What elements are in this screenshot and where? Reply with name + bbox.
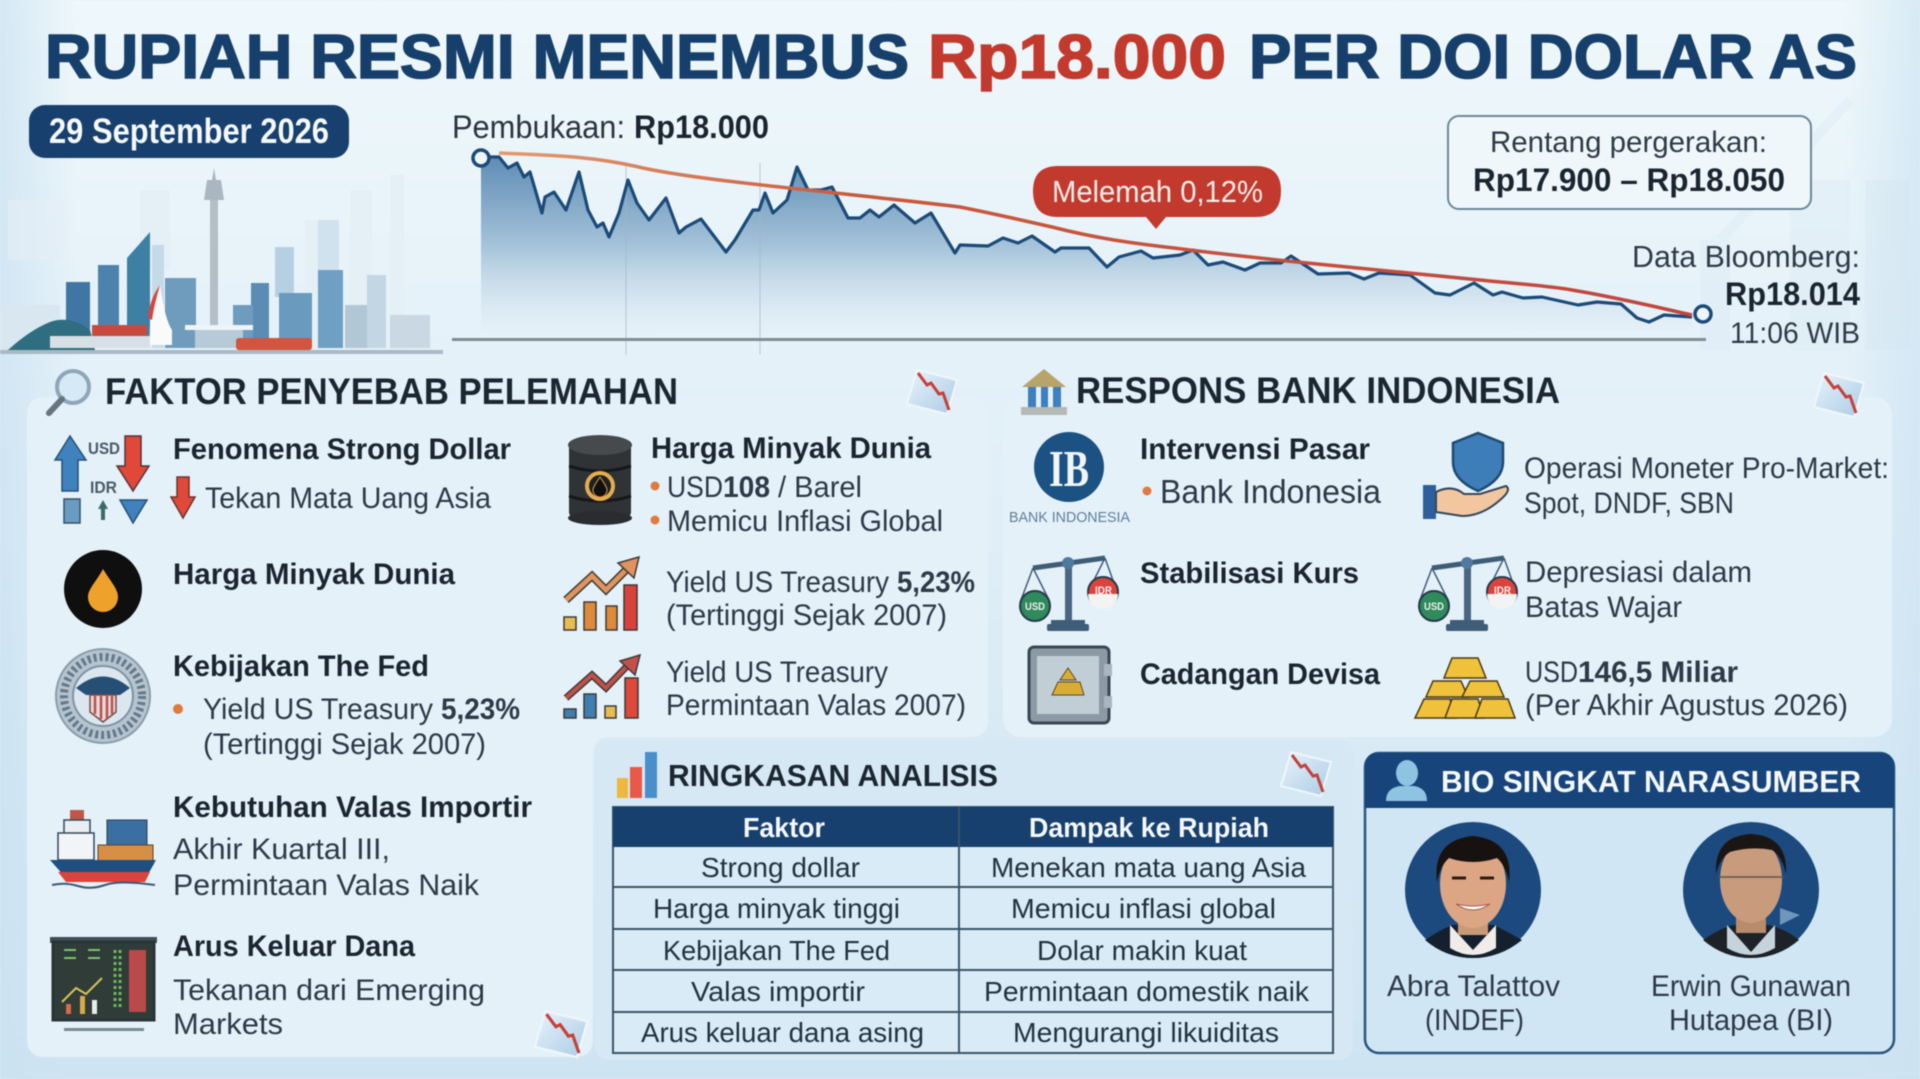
title <box>45 23 1857 92</box>
icon: cargo ship <box>50 810 156 888</box>
icon: USD IDR arrows: USD <box>88 439 120 458</box>
item: strong dollar: Tekan Mata Uang Asia <box>205 482 491 515</box>
item: the Fed policy <box>56 649 520 761</box>
illustration: Jakarta skyline <box>0 168 443 354</box>
box: trading range: Rp17.900 – Rp18.050 <box>1473 162 1785 198</box>
date badge: 29 September 2026 <box>49 112 329 151</box>
title: Rp18.000 <box>928 23 1226 92</box>
item: strong dollar: Fenomena Strong Dollar <box>173 433 511 466</box>
icon: trading monitor <box>50 937 157 1031</box>
icon: person <box>1386 760 1427 801</box>
item: the Fed policy: 5,23% <box>441 693 520 726</box>
icon: rising chart red <box>564 655 640 718</box>
item: oil price <box>64 550 455 628</box>
box: trading range <box>1448 116 1811 209</box>
caption: Erwin Gunawan Hutapea <box>1651 970 1851 1037</box>
box: trading range: Rentang pergerakan: <box>1490 126 1767 159</box>
panel: Bank Indonesia response <box>1003 369 1892 737</box>
callout: weakening percent <box>1033 166 1281 229</box>
item: importers' forex needs: Permintaan Valas Naik <box>173 869 480 902</box>
item: the Fed policy: Yield US Treasury <box>203 693 433 726</box>
table: factor and impact: Dolar makin kuat <box>1037 935 1247 966</box>
item: reserves amount: 146,5 Miliar <box>1578 656 1738 689</box>
heading: causes: FAKTOR PENYEBAB PELEMAHAN <box>105 371 678 412</box>
item: reserves amount <box>1415 656 1848 722</box>
bullet <box>650 516 660 524</box>
item: pro-market monetary operation: Operasi Moneter Pro-Market: <box>1524 452 1889 485</box>
item: yield and forex demand: Yield US Treasury <box>666 656 888 689</box>
portrait: Erwin Gunawan Hutapea <box>1683 822 1819 958</box>
item: US treasury yield <box>564 557 975 632</box>
panel: speaker bios <box>1365 753 1894 1053</box>
icon: USD IDR arrows: IDR <box>90 478 117 497</box>
item: depreciation within limits: Batas Wajar <box>1525 591 1682 624</box>
icon: federal reserve seal <box>56 649 150 743</box>
icon: oil barrel <box>568 435 632 525</box>
table: factor and impact: Mengurangi likuiditas <box>1013 1017 1279 1048</box>
caption: Erwin Gunawan Hutapea: Hutapea (BI) <box>1669 1004 1833 1037</box>
item: pro-market monetary operation <box>1423 433 1889 520</box>
icon: balance scale <box>1020 557 1118 631</box>
item: importers' forex needs: Kebutuhan Valas Importir <box>173 791 532 824</box>
table: factor and impact: Harga minyak tinggi <box>653 893 900 924</box>
icon: USD IDR arrows <box>55 436 149 523</box>
caption: Abra Talattov <box>1387 970 1560 1037</box>
table: factor and impact: Permintaan domestik naik <box>984 976 1310 1007</box>
table: factor and impact: Kebijakan The Fed <box>663 935 890 966</box>
label: opening price <box>452 109 769 145</box>
item: capital outflow: Markets <box>173 1008 283 1041</box>
item: reserves amount: (Per Akhir Agustus 2026) <box>1525 689 1848 722</box>
table: factor and impact: Strong dollar <box>701 852 860 883</box>
heading: bios: BIO SINGKAT NARASUMBER <box>1441 764 1861 799</box>
icon: balance scale <box>1419 557 1517 631</box>
icon: rising chart orange <box>564 557 639 630</box>
item: strong dollar <box>55 433 511 523</box>
bullet <box>173 704 183 714</box>
item: world oil price detail: / Barel <box>778 471 862 504</box>
table: factor and impact: Faktor <box>743 812 825 843</box>
icon: shield in hand <box>1423 433 1508 519</box>
item: world oil price detail: USD <box>667 471 723 504</box>
icon: Bank Indonesia logo <box>1009 432 1130 526</box>
callout: weakening percent: Melemah 0,12% <box>1052 174 1263 209</box>
item: US treasury yield: (Tertinggi Sejak 2007) <box>666 599 947 632</box>
title: PER DOI DOLAR AS <box>1249 23 1857 92</box>
item: foreign reserves: Cadangan Devisa <box>1140 658 1380 691</box>
icon: small red arrow <box>171 477 195 518</box>
title: RUPIAH RESMI MENEMBUS <box>45 23 909 92</box>
caption: Abra Talattov: Abra Talattov <box>1387 970 1560 1003</box>
panel: causes <box>27 370 988 1057</box>
item: exchange rate stabilisation <box>1020 557 1359 631</box>
item: world oil price detail: Memicu Inflasi Global <box>667 505 943 538</box>
item: reserves amount: USD <box>1525 656 1578 689</box>
panel: analysis summary <box>595 740 1353 1060</box>
item: world oil price detail: Harga Minyak Dunia <box>651 432 931 465</box>
label: opening price: Pembukaan: <box>452 109 625 145</box>
icon: Bank Indonesia logo: IB <box>1049 441 1089 498</box>
item: depreciation within limits <box>1419 556 1752 631</box>
heading: response: RESPONS BANK INDONESIA <box>1076 370 1560 411</box>
label: Bloomberg data: 11:06 WIB <box>1730 317 1860 350</box>
item: yield and forex demand: Permintaan Valas 2007) <box>666 689 966 722</box>
item: market intervention <box>1009 432 1382 526</box>
item: world oil price detail <box>568 432 943 538</box>
line chart: rupiah movement <box>452 150 1711 355</box>
item: capital outflow <box>50 930 587 1057</box>
item: oil price: Harga Minyak Dunia <box>173 558 455 591</box>
icon: mini falling chart <box>1281 752 1331 796</box>
icon: safe <box>1029 647 1112 723</box>
icon: gold bars <box>1415 658 1515 718</box>
icon: magnifier <box>49 371 89 413</box>
icon: bar chart <box>617 752 657 798</box>
item: world oil price detail: 108 <box>723 471 770 504</box>
item: market intervention: Intervensi Pasar <box>1140 433 1370 466</box>
bullet <box>650 482 660 490</box>
icon: mini falling chart <box>907 370 957 414</box>
item: US treasury yield: 5,23% <box>897 566 975 599</box>
item: the Fed policy: (Tertinggi Sejak 2007) <box>203 728 486 761</box>
icon: mini falling chart <box>1814 373 1864 417</box>
item: pro-market monetary operation: Spot, DNDF, SBN <box>1524 487 1734 520</box>
heading: analysis summary: RINGKASAN ANALISIS <box>668 758 998 793</box>
icon: Bank Indonesia logo: BANK INDONESIA <box>1009 509 1130 526</box>
table: factor and impact: Memicu inflasi global <box>1011 893 1276 924</box>
caption: Abra Talattov: (INDEF) <box>1425 1004 1524 1037</box>
item: depreciation within limits: Depresiasi dalam <box>1525 556 1752 589</box>
label: Bloomberg data: Data Bloomberg: <box>1632 239 1860 274</box>
portrait: Abra Talattov <box>1405 822 1541 958</box>
item: capital outflow: Arus Keluar Dana <box>173 930 415 963</box>
item: foreign reserves <box>1029 647 1380 723</box>
item: capital outflow: Tekanan dari Emerging <box>173 974 485 1007</box>
icon: bank building <box>1021 369 1067 415</box>
item: importers' forex needs <box>50 791 532 902</box>
bullet <box>1142 486 1152 496</box>
icon: mini falling chart <box>535 1011 587 1057</box>
table: factor and impact: Menekan mata uang Asia <box>991 852 1306 883</box>
table: factor and impact: Arus keluar dana asing <box>641 1017 924 1048</box>
label: opening price: Rp18.000 <box>634 109 769 145</box>
table: factor and impact: Dampak ke Rupiah <box>1029 812 1269 843</box>
date badge <box>29 105 349 158</box>
item: US treasury yield: Yield US Treasury <box>666 566 889 599</box>
label: Bloomberg data <box>1632 239 1860 350</box>
item: yield and forex demand <box>564 655 966 722</box>
item: importers' forex needs: Akhir Kuartal III, <box>173 833 390 866</box>
label: Bloomberg data: Rp18.014 <box>1725 276 1860 312</box>
icon: oil drop <box>64 550 142 628</box>
caption: Erwin Gunawan Hutapea: Erwin Gunawan <box>1651 970 1851 1003</box>
table: factor and impact: Valas importir <box>691 976 865 1007</box>
faint background decoration right <box>1700 100 1910 350</box>
item: market intervention: Bank Indonesia <box>1160 473 1382 510</box>
table: factor and impact <box>613 807 1333 1053</box>
item: the Fed policy: Kebijakan The Fed <box>173 650 429 683</box>
item: exchange rate stabilisation: Stabilisasi Kurs <box>1140 557 1359 590</box>
